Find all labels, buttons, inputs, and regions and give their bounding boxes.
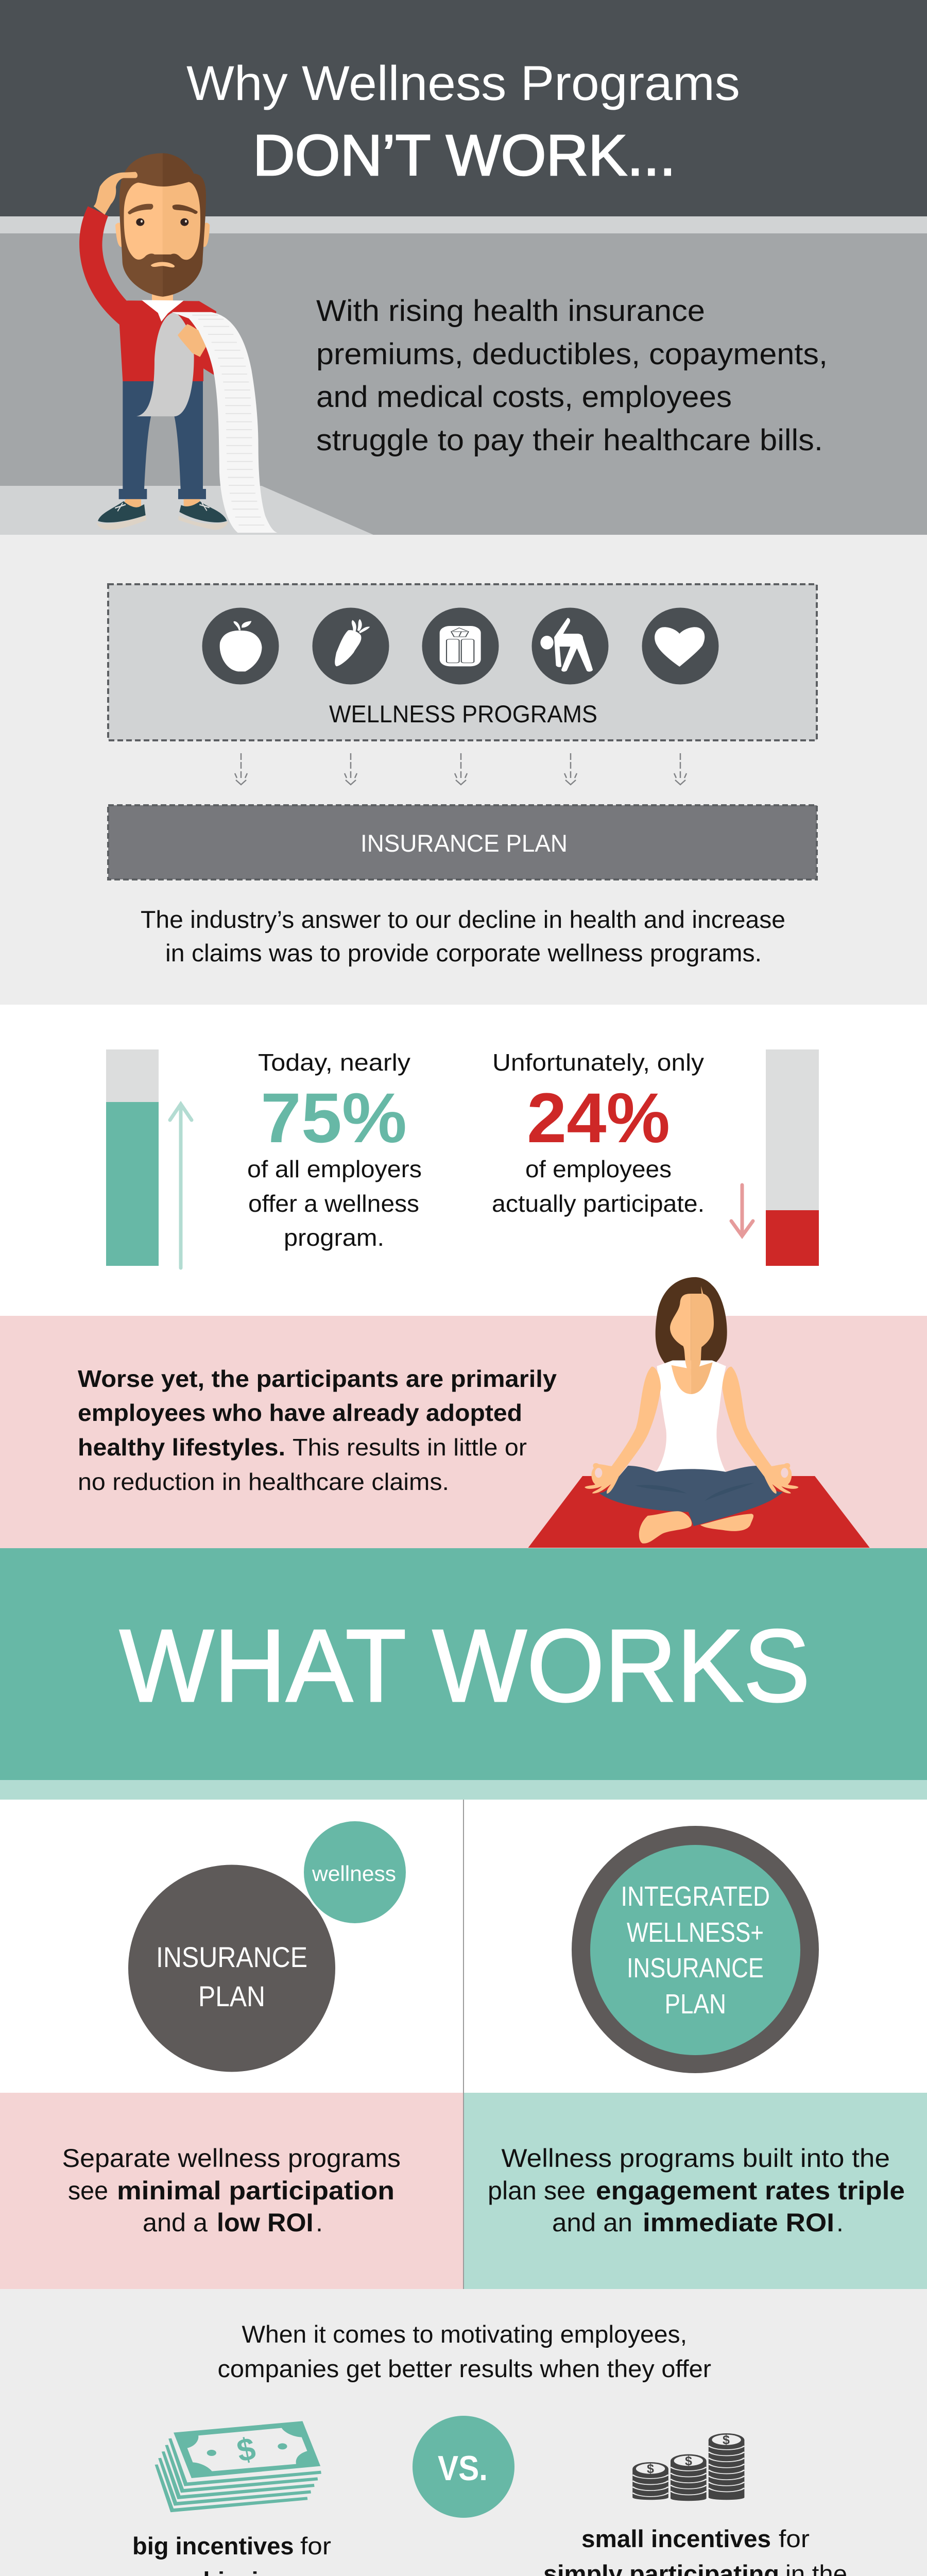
stat: 24 percent of employees: actually participate. <box>492 1190 705 1217</box>
icon: coin stacks: $ <box>723 2433 730 2447</box>
panel: incentives comparison <box>0 2289 927 2576</box>
illustration: meditating woman on mat <box>528 1262 870 1548</box>
panel: what works banner <box>0 1548 927 1800</box>
stat: 24 percent of employees: Unfortunately, only <box>492 1049 704 1076</box>
text: built-in programs result: Wellness programs built into the <box>502 2144 890 2173</box>
diagram: separate insurance plan and wellness: INSURANCE <box>156 1941 307 1973</box>
arrow: up <box>170 1104 192 1268</box>
text: separate programs result: Separate wellness programs <box>62 2144 401 2173</box>
title <box>186 56 740 188</box>
text: built-in programs result: plan see <box>488 2176 586 2205</box>
box: insurance plan <box>108 805 817 879</box>
text: separate programs result: low ROI <box>217 2208 313 2237</box>
icon: heart <box>642 608 719 684</box>
text: big incentives: for <box>300 2532 331 2560</box>
heading: what works: WHAT WORKS <box>119 1608 810 1723</box>
intro text: and medical costs, employees <box>316 380 732 414</box>
text: separate programs result: see <box>68 2176 108 2205</box>
intro text: With rising health insurance <box>316 294 705 328</box>
bar: 75 percent <box>106 1049 159 1266</box>
text: worse yet: no reduction in healthcare claims. <box>78 1468 449 1495</box>
text: big incentives: big incentives <box>132 2532 294 2560</box>
text: built-in programs result: and an <box>552 2208 632 2237</box>
arrow: down <box>731 1185 753 1236</box>
stat: 75 percent of employers: offer a wellness <box>248 1190 419 1217</box>
text: worse yet: This results in little or <box>293 1434 527 1461</box>
diagram: separate insurance plan and wellness: PLAN <box>198 1980 265 2012</box>
icon: stretching person <box>531 608 609 684</box>
text: worse yet <box>78 1365 557 1495</box>
panel: comparison <box>0 1800 927 2289</box>
icon: coin stacks <box>632 2433 744 2501</box>
stat: 75 percent of employers: 75% <box>261 1079 407 1158</box>
stat: 24 percent of employees: of employees <box>525 1156 672 1182</box>
diagram: integrated plan: INSURANCE <box>627 1953 764 1984</box>
panel: participation statistics <box>0 1005 927 1316</box>
icon: coin stacks: $ <box>685 2454 692 2468</box>
text: built-in programs result: . <box>836 2208 844 2237</box>
icon: vs badge: VS. <box>438 2449 488 2488</box>
stat: 75 percent of employers: program. <box>284 1224 384 1251</box>
text: motivating employees: companies get better results when they offer <box>217 2355 711 2382</box>
text: industry's answer <box>141 906 785 967</box>
intro text: struggle to pay their healthcare bills. <box>316 423 823 457</box>
illustration: man with long bill <box>79 153 277 533</box>
stat: 75 percent of employers <box>247 1049 422 1251</box>
icon: stack of cash <box>155 2421 321 2512</box>
text: small incentives <box>543 2525 847 2576</box>
icon: vs badge <box>413 2416 514 2518</box>
text: motivating employees <box>217 2320 711 2382</box>
stat: 75 percent of employers: of all employers <box>247 1156 422 1182</box>
text: industry's answer: in claims was to provide corporate wellness programs. <box>165 939 762 967</box>
icon: apple <box>202 608 279 684</box>
text: worse yet: Worse yet, the participants are primarily <box>78 1365 557 1392</box>
diagram: integrated plan: WELLNESS+ <box>627 1917 764 1948</box>
diagram: integrated plan: PLAN <box>664 1989 726 2020</box>
title: Why Wellness Programs <box>186 56 740 111</box>
panel: wellness programs diagram <box>0 535 927 1005</box>
panel: worse yet <box>0 1262 927 1548</box>
text: small incentives: for <box>779 2525 810 2552</box>
intro text: premiums, deductibles, copayments, <box>316 337 828 371</box>
text: separate programs result: minimal participation <box>117 2176 394 2205</box>
text: worse yet: employees who have already adopted <box>78 1399 522 1426</box>
text: separate programs result <box>62 2144 401 2237</box>
icon: coin stacks: $ <box>647 2462 654 2476</box>
box: wellness programs <box>108 584 817 740</box>
text: built-in programs result: immediate ROI <box>643 2208 834 2237</box>
icon: carrot <box>312 608 389 684</box>
text: industry's answer: The industry’s answer to our decline in health and increase <box>141 906 785 933</box>
box: wellness programs: WELLNESS PROGRAMS <box>329 700 597 727</box>
stat: 24 percent of employees <box>492 1049 705 1217</box>
text: worse yet: healthy lifestyles. <box>78 1434 285 1461</box>
stat: 75 percent of employers: Today, nearly <box>258 1049 410 1076</box>
stat: 24 percent of employees: 24% <box>527 1079 670 1158</box>
intro text <box>316 294 828 457</box>
box: insurance plan: INSURANCE PLAN <box>360 829 568 857</box>
text: big incentives <box>132 2532 331 2576</box>
diagram: separate insurance plan and wellness <box>128 1820 407 2072</box>
diagram: separate insurance plan and wellness: wellness <box>312 1861 396 1886</box>
text: built-in programs result: engagement rates triple <box>596 2176 905 2205</box>
text: separate programs result: and a <box>143 2208 208 2237</box>
panel: header <box>0 0 927 535</box>
title: DON’T WORK... <box>253 123 676 188</box>
bar: 24 percent <box>766 1049 819 1266</box>
icon: stack of cash: $ <box>234 2431 259 2469</box>
icon: scale <box>422 608 499 684</box>
text: separate programs result: . <box>316 2208 323 2237</box>
text: built-in programs result <box>488 2144 905 2237</box>
arrows: programs down to plan <box>235 753 686 785</box>
text: motivating employees: When it comes to motivating employees, <box>242 2320 687 2348</box>
diagram: integrated plan <box>572 1826 819 2073</box>
diagram: integrated plan: INTEGRATED <box>621 1881 770 1912</box>
text: small incentives: small incentives <box>581 2525 771 2552</box>
